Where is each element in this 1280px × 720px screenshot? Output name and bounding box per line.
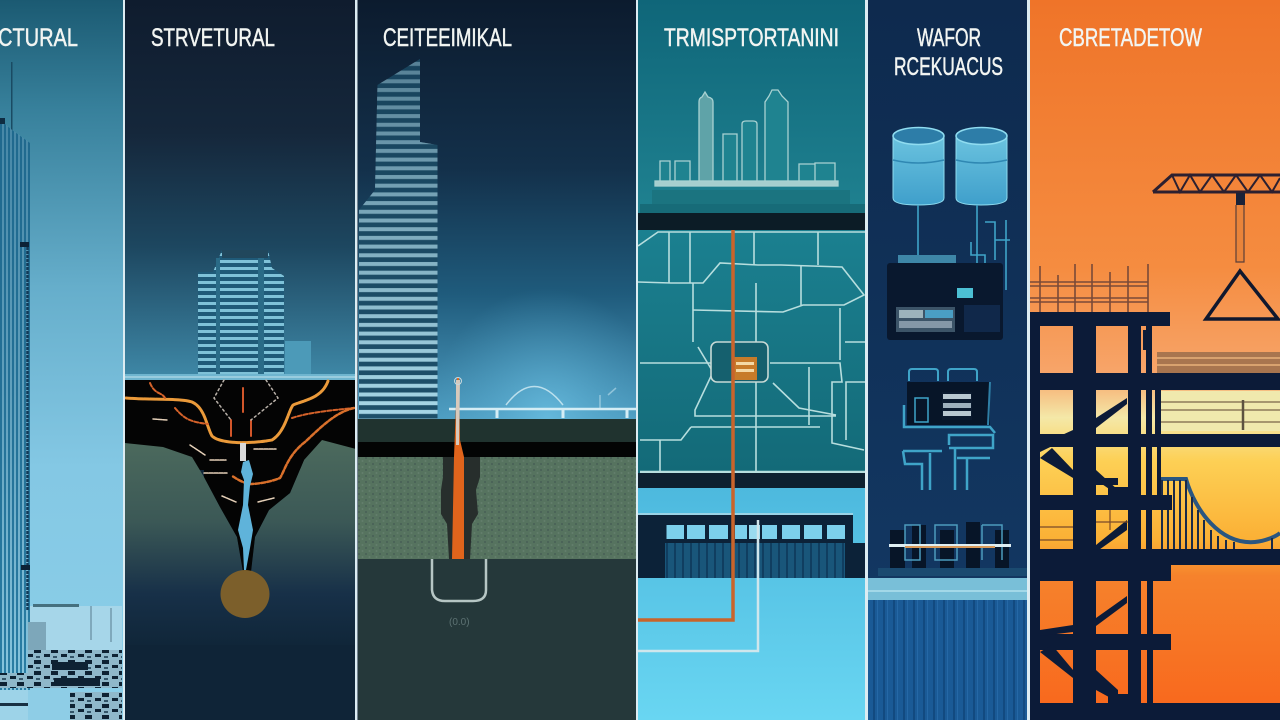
- reservoir surface: [868, 578, 1027, 720]
- heading: geotechnical: CEITEEIMIKAL: [383, 24, 512, 52]
- suspension bridge: [1160, 479, 1280, 550]
- heading: water resources: [894, 24, 1003, 81]
- heading: transportation: TRMISPTORTANINI: [664, 24, 839, 52]
- light route line: [638, 520, 758, 651]
- small label: (0.0): [449, 617, 470, 628]
- heading: water resources: WAFOR: [917, 24, 981, 52]
- pile in borehole: [441, 378, 480, 559]
- t-shaped pipe junctions: [903, 435, 993, 490]
- divider: [355, 0, 358, 720]
- orange route line: [638, 230, 733, 620]
- bridge on horizon: [449, 386, 636, 418]
- background scaffold band: [1157, 352, 1280, 431]
- divider: [1027, 0, 1030, 720]
- sky glimpse details: [1040, 510, 1128, 540]
- stepped skyscraper: [359, 59, 438, 419]
- water band: [638, 473, 866, 720]
- panel: geotechnical: [358, 0, 637, 720]
- control unit: [887, 255, 1003, 340]
- city at tower base: [0, 604, 122, 720]
- ground cross-section: [125, 440, 355, 624]
- water tanks: [893, 128, 1007, 205]
- tower crane: [1153, 175, 1280, 319]
- feed pipes: [918, 205, 1010, 310]
- boulder: [220, 570, 270, 618]
- station building: [638, 513, 866, 578]
- soil layers: [358, 419, 637, 720]
- treatment unit: [904, 369, 995, 433]
- orange utility lines: [126, 380, 354, 502]
- panel: transportation: [638, 0, 866, 720]
- divider: [865, 0, 868, 720]
- water jet: [238, 443, 253, 570]
- road network map: [638, 230, 866, 473]
- panel: construction: [1030, 0, 1280, 720]
- heading: partial structural: CTURAL: [0, 24, 78, 52]
- panel: structural left: [0, 0, 123, 720]
- heading: water resources: RCEKUACUS: [894, 53, 1003, 81]
- divider: [123, 0, 126, 720]
- heading: construction: CBRETADETOW: [1059, 24, 1202, 52]
- embankment: [638, 190, 866, 230]
- scaffold on deck: [1030, 264, 1148, 312]
- heading: structural: STRVETURAL: [151, 24, 275, 52]
- underground cavity: [125, 380, 356, 470]
- divider: [636, 0, 638, 720]
- pump row: [878, 522, 1027, 576]
- panel: water resources: [868, 0, 1027, 720]
- skyscraper: [0, 62, 30, 720]
- steel frame: [1030, 312, 1280, 720]
- tower with stacked floors: [125, 250, 356, 380]
- skyline outline: [655, 90, 838, 186]
- panel: structural: [125, 0, 356, 720]
- central interchange chip: [711, 342, 768, 382]
- u-shaped footing: [432, 559, 486, 601]
